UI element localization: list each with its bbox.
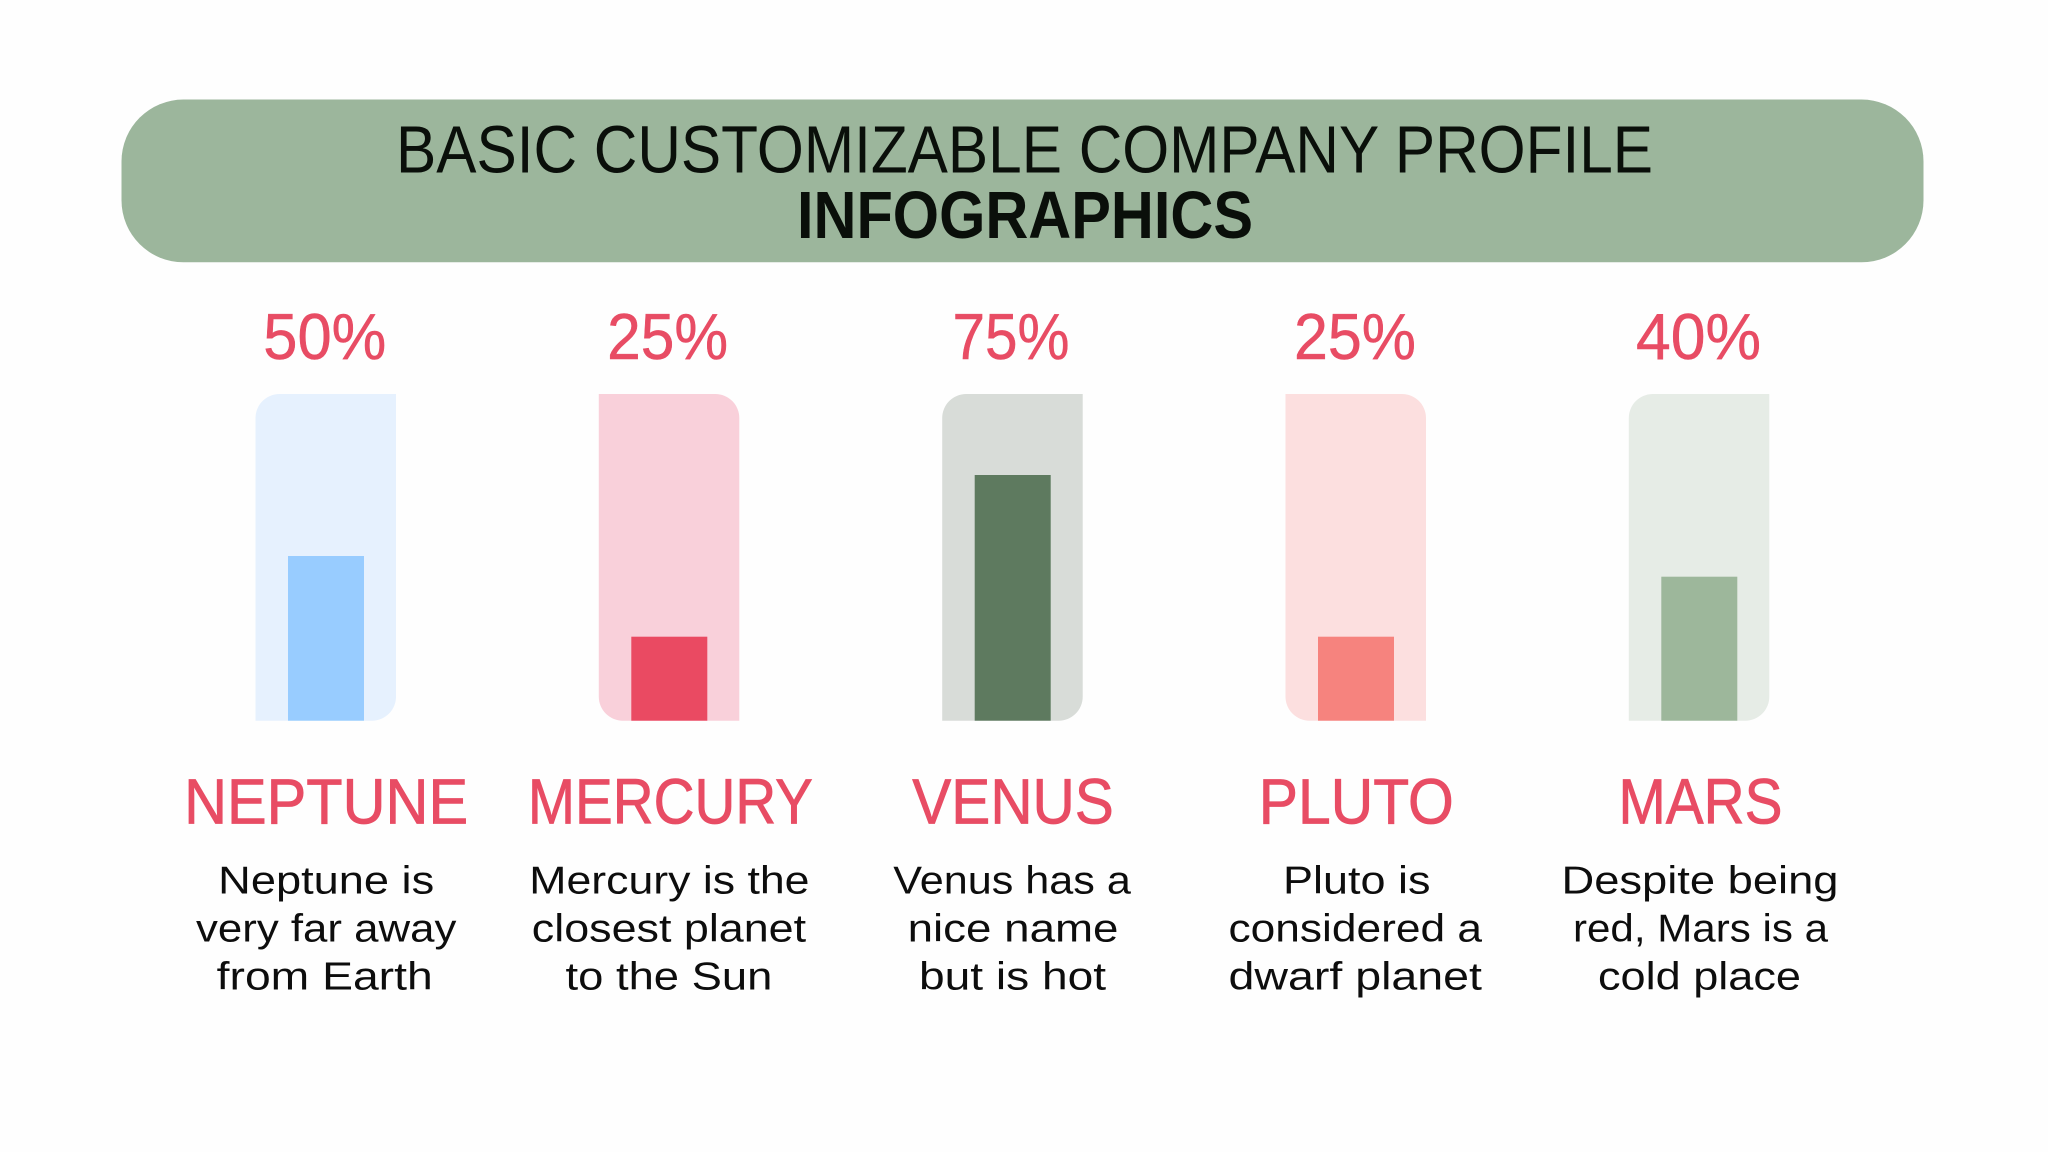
title line 2: INFOGRAPHICS <box>797 179 1253 253</box>
description: Venus <box>893 860 1132 998</box>
description: Mars: cold place <box>1598 956 1801 998</box>
name: Mercury: MERCURY <box>528 766 813 838</box>
description: Mars <box>1562 860 1838 998</box>
description: Venus: but is hot <box>919 956 1106 998</box>
name: Neptune: NEPTUNE <box>184 766 468 838</box>
panel: Venus <box>893 301 1132 998</box>
description: Neptune <box>196 860 457 998</box>
description: Venus: nice name <box>908 908 1118 950</box>
bar chart: Venus 75% <box>942 394 1083 721</box>
panel: Pluto <box>1228 301 1483 998</box>
percentage: 25%: 25% <box>1294 301 1416 373</box>
description: Neptune: very far away <box>196 908 457 950</box>
title line 1: BASIC CUSTOMIZABLE COMPANY PROFILE <box>396 114 1653 188</box>
description: Mercury: closest planet <box>532 908 806 950</box>
description: Neptune: Neptune is <box>218 860 434 902</box>
percentage: 25%: 25% <box>607 301 728 373</box>
description: Mars: Despite being <box>1562 860 1838 902</box>
bar chart: Mars 40% <box>1629 394 1769 721</box>
description: Mercury <box>529 860 810 998</box>
name: Mars: MARS <box>1618 766 1782 838</box>
percentage: 50%: 50% <box>263 301 386 373</box>
description: Pluto: dwarf planet <box>1228 956 1482 998</box>
description: Venus: Venus has a <box>893 860 1132 902</box>
title banner <box>122 100 1924 262</box>
panel: Mars <box>1562 301 1838 998</box>
description: Pluto: Pluto is <box>1283 860 1430 902</box>
description: Mercury: Mercury is the <box>529 860 810 902</box>
percentage: 75%: 75% <box>952 301 1070 373</box>
description: Pluto <box>1228 860 1483 998</box>
description: Neptune: from Earth <box>217 956 433 998</box>
percentage: 40%: 40% <box>1636 301 1761 373</box>
panel: Neptune <box>184 301 468 998</box>
name: Pluto: PLUTO <box>1259 766 1454 838</box>
bar chart: Mercury 25% <box>599 394 739 721</box>
description: Mercury: to the Sun <box>566 956 772 998</box>
description: Mars: red, Mars is a <box>1573 908 1829 950</box>
bar chart: Neptune 50% <box>256 394 396 721</box>
panel: Mercury <box>528 301 813 998</box>
description: Pluto: considered a <box>1228 908 1483 950</box>
name: Venus: VENUS <box>912 766 1114 838</box>
bar chart: Pluto 25% <box>1286 394 1426 721</box>
